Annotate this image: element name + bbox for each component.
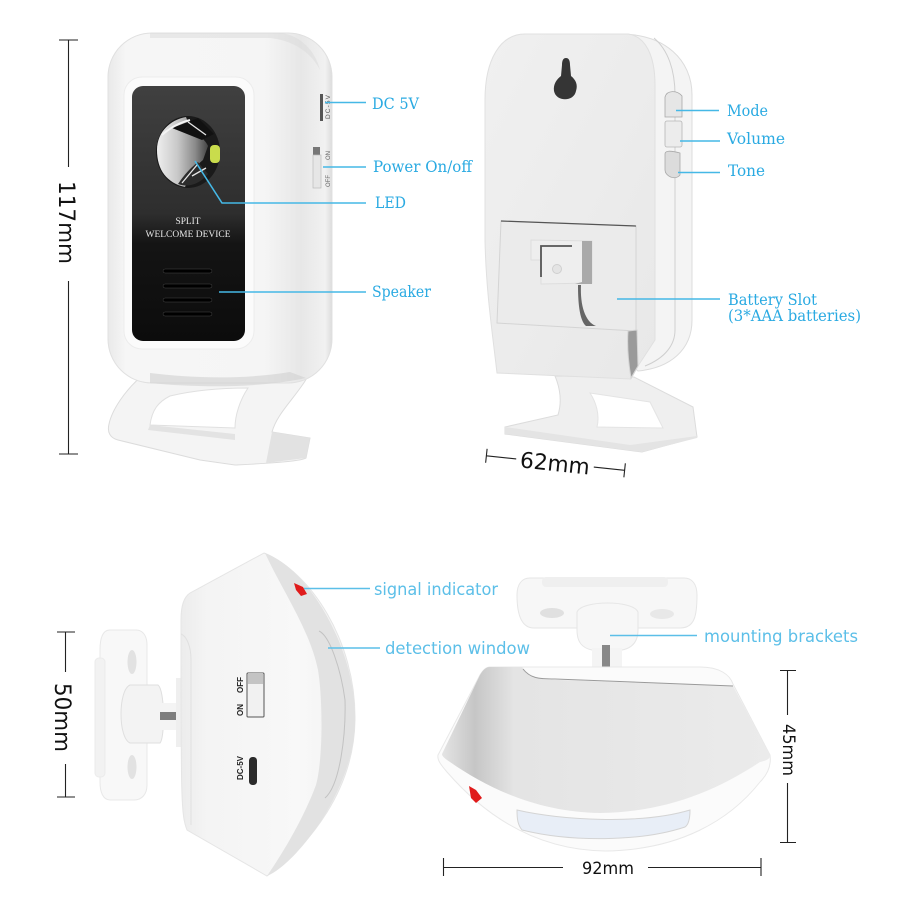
wall bracket: side <box>95 630 181 800</box>
dimension: 92mm width <box>444 858 761 879</box>
device name: WELCOME DEVICE <box>146 230 231 240</box>
dimension: 45mm height <box>778 670 798 842</box>
callouts: front receiver <box>195 94 474 301</box>
display panel <box>132 86 245 341</box>
callout: Tone <box>678 161 765 180</box>
callout: LED: LED <box>375 193 406 212</box>
back plate <box>485 34 655 379</box>
power switch: side: OFF <box>236 677 245 693</box>
callout: Battery Slot: Battery Slot <box>728 290 818 309</box>
callout: DC 5V <box>325 94 419 113</box>
USB port: side: DC-5V <box>236 755 245 780</box>
detection window: front <box>517 810 690 839</box>
DC port: DC-5V <box>325 94 332 119</box>
callout: Volume <box>680 129 785 148</box>
buttons: Mode, Volume, Tone <box>665 92 682 178</box>
signal indicator dot: side <box>294 583 307 596</box>
callout: DC 5V: DC 5V <box>372 94 419 113</box>
power switch: side: ON <box>236 704 245 716</box>
callouts: back receiver <box>617 101 861 325</box>
speaker slots <box>163 269 212 316</box>
back receiver device <box>485 34 697 452</box>
callout: LED <box>195 161 406 212</box>
keyhole <box>554 58 577 99</box>
dimension: 117mm height: 117mm <box>53 181 78 264</box>
callout: signal indicator: signal indicator <box>374 580 498 600</box>
power switch: OFF <box>326 175 332 187</box>
USB port: side <box>236 755 257 785</box>
callout: Battery Slot: (3*AAA batteries) <box>728 306 861 325</box>
dimension: 92mm width: 92mm <box>582 859 634 879</box>
power switch: side <box>236 673 264 717</box>
stand: front receiver <box>108 345 314 465</box>
battery cover <box>497 221 636 331</box>
dimension: 62mm width: 62mm <box>519 448 591 481</box>
sensor body: side <box>181 553 355 876</box>
front receiver device <box>108 33 332 465</box>
device name: SPLIT <box>176 217 201 227</box>
callout: Power On/off: Power On/off <box>373 157 474 176</box>
callout: Mode: Mode <box>727 101 768 120</box>
casing: front receiver <box>108 33 332 383</box>
power switch <box>313 147 332 188</box>
callout: Mode <box>676 101 768 120</box>
callout: detection window: detection window <box>385 639 530 659</box>
side sensor device <box>95 553 355 876</box>
callout: mounting brackets: mounting brackets <box>704 627 858 647</box>
hinge <box>628 330 638 378</box>
signal indicator dot: front <box>469 786 482 803</box>
dimension: 62mm width <box>485 445 626 484</box>
DC port <box>320 94 332 121</box>
dimension: 50mm height: 50mm <box>49 683 74 752</box>
callout: Speaker: Speaker <box>372 282 431 301</box>
dimension: 117mm height <box>53 40 78 454</box>
LED lamp <box>156 116 220 188</box>
side casing: back <box>620 34 692 371</box>
stand: back <box>505 376 697 452</box>
callout: Tone: Tone <box>728 161 765 180</box>
dimension: 45mm height: 45mm <box>778 724 798 776</box>
device name <box>146 217 231 240</box>
sensor body: front <box>438 667 770 851</box>
front sensor device <box>438 577 770 851</box>
wall bracket: front sensor <box>517 577 697 670</box>
callout: Battery Slot <box>617 290 861 325</box>
power switch: ON <box>326 151 332 160</box>
dimension: 50mm height <box>49 632 75 797</box>
callout: Volume: Volume <box>726 129 785 148</box>
